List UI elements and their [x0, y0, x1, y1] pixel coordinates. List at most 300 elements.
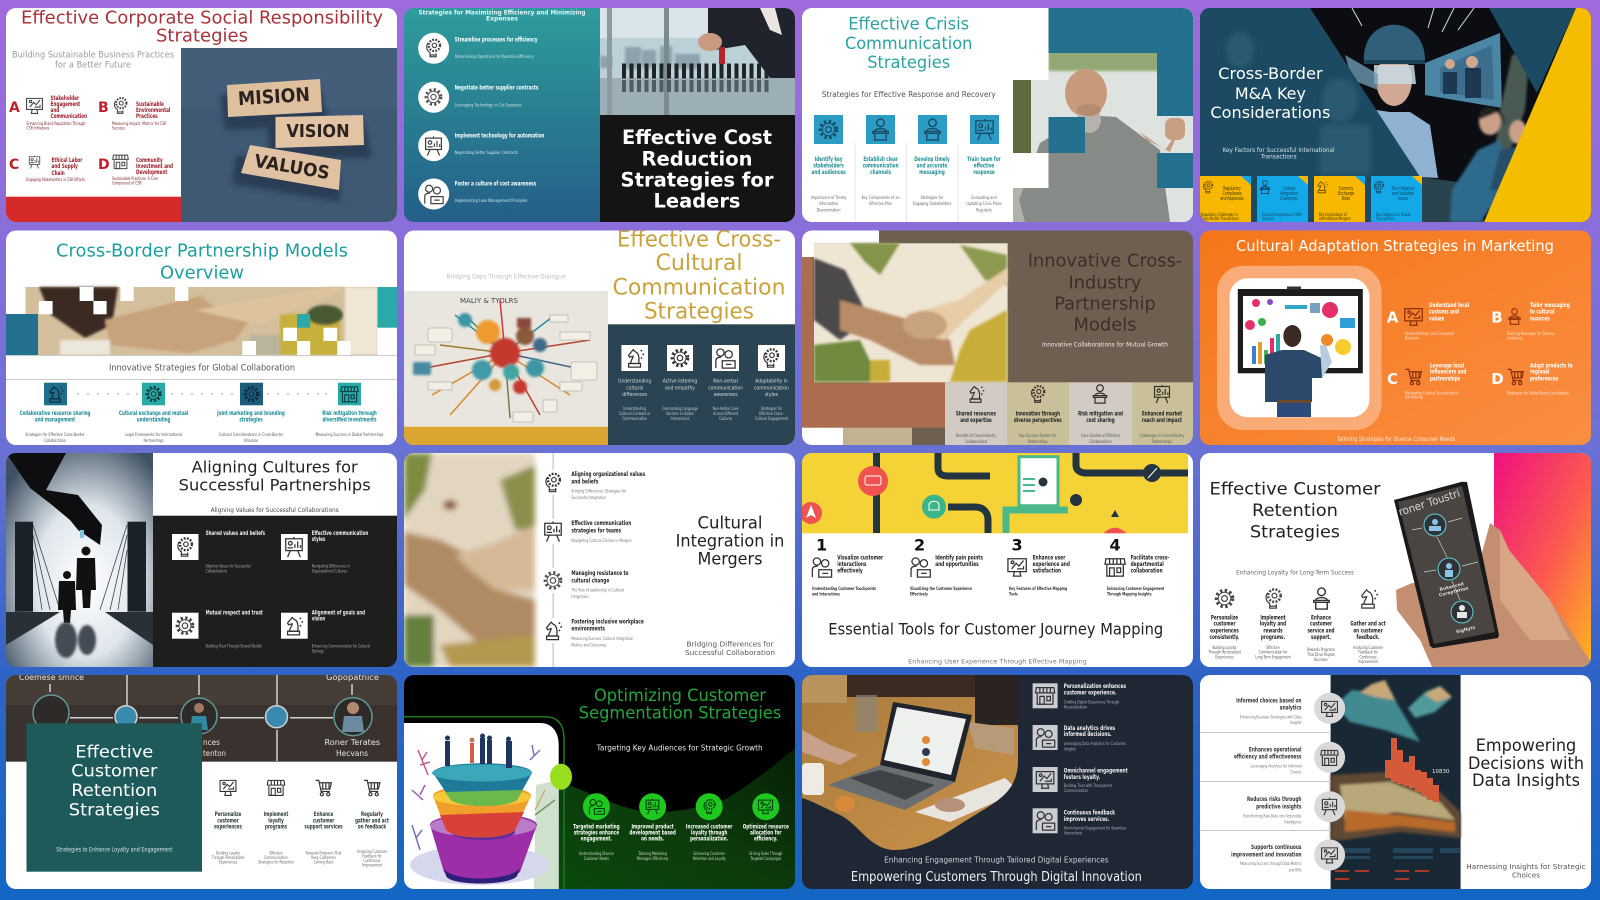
pillar 1: Understanding [618, 378, 651, 385]
step 3: Integration [571, 595, 589, 599]
model 3 [216, 383, 285, 443]
photo: wooden blocks mission vision values: VALUOS [253, 151, 331, 184]
item D community: Investment and [136, 163, 173, 170]
item C ethical labor: Ethical Labor [52, 157, 83, 164]
factor card 4: Due Diligence in Global [1376, 213, 1410, 217]
photo: presenter gesturing [1013, 45, 1193, 222]
tactic 1: experiences [214, 824, 242, 831]
tile 4: Enhanced market [1142, 411, 1182, 418]
tactic 2: loyalty and [1260, 621, 1286, 628]
factor card 3 [1314, 176, 1365, 222]
illustration: yellow journey map [800, 453, 1188, 533]
dark panel [153, 516, 397, 668]
title: Retention [1252, 501, 1338, 521]
pillar 1: Understanding [623, 407, 647, 411]
item D community: Sustainable Practices: A Core [112, 177, 159, 181]
tactic 4: gather and act [355, 818, 389, 825]
tile 3: cost sharing [1086, 417, 1115, 424]
step 2 [541, 519, 632, 544]
step 4: collaboration [1131, 568, 1163, 575]
column 2 [862, 115, 900, 206]
item D community [98, 155, 173, 186]
column 3 [913, 115, 951, 206]
tile 4: Partnerships [1152, 440, 1172, 444]
pillar 2 [662, 345, 698, 421]
segment 2: Messages Effectively [637, 857, 669, 861]
tile 1: Collaborations [965, 440, 987, 444]
light streaks [1352, 8, 1474, 32]
factor card 4: and Valuation [1392, 190, 1414, 196]
column dividers [855, 143, 958, 222]
column 3: and accurate [917, 163, 948, 170]
factor card 2: Challenges [1280, 195, 1298, 201]
photo: 3D terrain with bar data [1331, 675, 1461, 889]
photo: org network diagram: Gopopatnice [326, 673, 379, 682]
tactic 1: Through Personalized [211, 856, 244, 860]
photo: woman in helmet with hologram screens [1345, 25, 1530, 222]
list item 4 [1033, 808, 1126, 835]
title: Partnership [1054, 293, 1156, 314]
slide 2: cost reduction [404, 8, 795, 222]
tactic 3: Enhance [314, 811, 334, 818]
factor card 4 [1371, 176, 1422, 222]
tactic A: customs and [1429, 309, 1459, 316]
model 2 [119, 383, 188, 443]
factor card 1: Compliance [1222, 190, 1242, 196]
tactic 1 [211, 780, 244, 865]
tile 3 [1069, 382, 1132, 445]
item B sustainable: B [98, 100, 109, 116]
slide 16: data insights [1200, 675, 1591, 889]
item D community: Component of CSR [112, 181, 142, 186]
segment 3: personalization. [690, 836, 728, 843]
factor card 3: Currency [1339, 185, 1354, 191]
tile 1 [945, 382, 1007, 445]
insight 3: Intelligence [1284, 820, 1302, 825]
subtitle: Choices [1512, 871, 1540, 879]
tactic 3: Business [1314, 658, 1328, 662]
item D community: Community [136, 157, 163, 164]
white illustration panel with funnel [404, 723, 559, 889]
title [676, 513, 784, 568]
tactic 2 [1255, 589, 1291, 659]
tactic C: partnerships [1430, 376, 1460, 383]
item B sustainable [98, 98, 171, 131]
insight 3 [1242, 791, 1345, 825]
step 4: environments [571, 626, 605, 633]
list item 2 [1033, 725, 1126, 751]
model 3: Cultural Considerations in Cross-Border [219, 433, 283, 437]
segment 4: efficiency. [754, 836, 778, 843]
background teal shards [1200, 8, 1576, 222]
step 1: and Interactions [812, 592, 840, 597]
column 2: Establish clear [863, 156, 898, 163]
tactic 1: Building Loyalty [216, 851, 241, 855]
step 1 [812, 536, 883, 597]
model 2: Cultural exchange and mutual [119, 410, 188, 417]
factor card 3: International Mergers [1319, 217, 1351, 221]
title panel: Leaders [654, 190, 740, 212]
insight 1: analytics [1280, 705, 1302, 712]
tile 1: Benefits of Cross-Industry [956, 434, 997, 438]
model 3: Joint marketing and branding [216, 410, 285, 417]
title panel: Effective Cost [622, 126, 772, 149]
step 3: cultural change [571, 578, 610, 585]
step 2 [910, 536, 983, 597]
title: Effective Cross- [617, 228, 781, 253]
model 2: understanding [137, 417, 171, 424]
yellow wedge [1484, 8, 1591, 222]
list item 2: Insights [1064, 747, 1076, 751]
title [579, 686, 781, 723]
tile 4: reach and impact [1142, 417, 1182, 424]
pillar 2: Overcoming Language [662, 407, 698, 411]
factor card 2 [1257, 176, 1308, 222]
title: Industry [1068, 272, 1142, 293]
title: Successful Partnerships [179, 476, 371, 495]
segment 4: Optimized resource [743, 824, 789, 831]
column 1: and audiences [812, 169, 846, 176]
step 3: Managing resistance to [571, 570, 629, 577]
pillar 3: awareness [714, 392, 738, 398]
pillar 4 [754, 345, 789, 421]
list item 1: Personalization enhances [1064, 683, 1126, 690]
tile 2: diverse perspectives [1014, 417, 1062, 424]
tactic D: D [1491, 370, 1504, 388]
segment 2: Tailoring Marketing [638, 852, 667, 856]
step 3 [1008, 536, 1070, 597]
model 1: Collaboration [44, 439, 66, 443]
model 4: Risk mitigation through [322, 410, 377, 417]
tactic 4 [1350, 590, 1386, 664]
faint crowd in teal panel [1226, 32, 1370, 175]
list item 2 [418, 82, 538, 113]
slide 13: customer retention dark [6, 673, 397, 889]
phone with diagram [1394, 482, 1499, 648]
item C ethical labor: Engaging Stakeholders in CSR Efforts [26, 178, 85, 182]
pillar 4: styles [765, 392, 778, 398]
pillar 1: Cultural Contexts in [619, 412, 651, 416]
model 4 [316, 383, 383, 437]
segment 2: Improved product [631, 824, 674, 831]
subtitle: Transactions [1260, 154, 1297, 161]
tactic D [1491, 363, 1573, 395]
factor card 4: Issues [1398, 195, 1408, 201]
tactic 1 [1207, 590, 1241, 659]
column 4: effective [974, 163, 995, 170]
insight 2 [1234, 742, 1345, 775]
step 2: and opportunities [935, 561, 979, 568]
value 1: Aligning Values for Successful [206, 564, 251, 569]
tactic C: Leverage local [1430, 363, 1464, 370]
title: Cultural Adaptation Strategies in Marketing [1236, 237, 1554, 255]
title: Optimizing Customer [594, 686, 766, 706]
tactic B [1491, 302, 1570, 341]
title [845, 14, 972, 73]
tactic 2: programs. [1261, 634, 1285, 641]
pillar 4: Strategies for [761, 407, 782, 411]
tactic 1: Personalize [1211, 615, 1239, 622]
tile 1: and expertise [960, 417, 992, 424]
column 1 [811, 115, 847, 212]
tactic C: Advertising [1405, 395, 1423, 400]
title [56, 241, 348, 283]
insight 4: improvement and innovation [1231, 852, 1302, 859]
step 1 [541, 470, 645, 500]
column 3: Strategies for [921, 195, 944, 200]
step 3: The Role of Leadership in Cultural [571, 588, 624, 593]
tactic B: Tailoring Messages for Diverse [1506, 332, 1555, 336]
pillar 4: Adaptability in [755, 378, 788, 385]
column 4: Train team for [967, 156, 1001, 163]
step 3: satisfaction [1033, 568, 1061, 575]
value 4: vision [312, 616, 326, 623]
segment 3: Retention and Loyalty [693, 857, 726, 861]
mind map illustration [404, 291, 608, 427]
gold footer strip [404, 427, 608, 446]
slide 6: cross-cultural communication [404, 228, 795, 446]
title: Effective Crisis [848, 14, 969, 34]
item A stakeholder: Stakeholder [50, 95, 79, 102]
subtitle [1466, 863, 1586, 879]
subtitle: Enhancing Engagement Through Tailored Digital Experiences [884, 855, 1109, 864]
column 4: response [973, 169, 995, 176]
pillar 1: Communication [622, 417, 648, 421]
tactic D: regional [1530, 369, 1550, 376]
slide 3: crisis communication [802, 8, 1194, 222]
subtitle: Enhancing User Experience Through Effective Mapping [908, 658, 1087, 666]
title: Aligning Cultures for [192, 458, 358, 477]
insight 2: Leveraging Analytics for Informed [1251, 764, 1302, 769]
title card [26, 723, 202, 872]
subtitle: for a Better Future [55, 60, 131, 70]
value 2: Navigating Differences in [312, 564, 350, 569]
photo: wooden blocks mission vision values: VISION [286, 121, 350, 142]
tactic 3: Coming Back [314, 860, 334, 865]
title: Models [1074, 315, 1136, 336]
segment 1: Customer Needs [584, 857, 609, 861]
title: Effective Corporate Social Responsibility [21, 8, 383, 28]
segment 1 [573, 793, 620, 861]
factor card 1: Regulatory Challenges in [1201, 213, 1238, 217]
segment 1: engagement. [581, 836, 612, 843]
tactic A: Understand local [1429, 302, 1469, 309]
subtitle: Enhancing Loyalty for Long-Term Success [1236, 568, 1355, 576]
list item 2: Negotiate better supplier contracts [455, 85, 538, 92]
pillar 3 [708, 345, 743, 421]
slide 10: cultural integration [404, 453, 795, 667]
list item 3 [418, 130, 545, 161]
factor card 1: Cross-Border Transactions [1201, 217, 1239, 221]
insight 4: and KPIs [1289, 868, 1302, 873]
tactic 2: Communication [264, 856, 288, 860]
model 1: and management [35, 417, 76, 424]
column 3: Develop timely [914, 156, 950, 163]
step 4: Facilitate cross- [1131, 555, 1169, 562]
column 1: Dissemination [817, 207, 841, 212]
tactic 1: customer [1213, 621, 1236, 628]
tile 3: Collaborations [1089, 440, 1112, 444]
column 3: Engaging Stakeholders [913, 201, 951, 206]
red footer band [6, 197, 181, 223]
column 4 [966, 115, 1002, 212]
tactic B: Tailor messaging [1530, 302, 1570, 309]
factor card 4: Due Diligence [1392, 185, 1415, 191]
item A stakeholder: and [50, 107, 60, 114]
title: Empowering [1476, 736, 1576, 755]
subtitle: Key Factors for Successful International [1223, 147, 1335, 154]
title: M&A Key [1235, 84, 1306, 103]
item A stakeholder: A [9, 100, 20, 116]
title: Mergers [698, 549, 762, 568]
pillar 3: Non-verbal [713, 378, 738, 385]
segment 3: loyalty through [691, 830, 728, 837]
tactic 3: customer [313, 818, 335, 825]
pillar 2: Barriers in Global [666, 412, 694, 416]
title panel [600, 115, 795, 222]
value 4 [281, 610, 370, 653]
tile 3: Case Studies of Effective [1081, 434, 1121, 438]
step 1: Visualize customer [837, 555, 883, 562]
segment 3: Enhancing Customer [694, 852, 725, 856]
green outline [404, 717, 564, 889]
title: Empowering Customers Through Digital Innovation [851, 870, 1142, 885]
title: Strategies [156, 26, 248, 46]
column 3: messaging [919, 169, 945, 176]
slide 8: cultural adaptation marketing [1200, 230, 1591, 446]
column 4: Evaluating and [971, 195, 997, 200]
model 1: Strategies for Effective Cross-Border [25, 433, 85, 437]
list item 2: Leveraging Technology to Cut Expenses [455, 102, 521, 108]
tactic 1: Personalize [215, 811, 242, 818]
title: Cultural [698, 513, 762, 532]
tile 2: Key Success Factors for [1019, 434, 1057, 438]
title panel: Strategies for [620, 169, 774, 192]
step 2: 2 [914, 536, 925, 555]
hand holding phone [1396, 523, 1591, 667]
insight 3: Reduces risks through [1247, 796, 1302, 803]
item C ethical labor [9, 156, 85, 182]
tactic A [1387, 302, 1469, 341]
phone with diagram: SigNyts [1456, 625, 1476, 635]
factor card 2: Integration [1280, 190, 1298, 196]
segment 1: Understanding Diverse [579, 852, 614, 856]
segment 1: Targeted marketing [573, 824, 620, 831]
insight 1: Enhancing Business Strategies with Data [1240, 715, 1302, 719]
value 4: Enhancing Communication for Cultural [312, 644, 370, 648]
photo: blurred handshake [404, 453, 535, 667]
photo: org network diagram: Coemese smnce [19, 673, 84, 682]
subtitle: Innovative Collaborations for Mutual Growth [1042, 341, 1168, 349]
tactic A: values [1429, 316, 1444, 323]
tile 2: Partnerships [1028, 440, 1048, 444]
tactic 1: consistently. [1210, 634, 1239, 641]
segment 4 [743, 793, 789, 861]
tactic 3: support services [304, 824, 343, 831]
tactic 3 [1307, 588, 1335, 662]
tactic 4: Analyzing Customer [1353, 646, 1384, 650]
tactic 3: Rewards Programs That [306, 851, 342, 855]
list item 4: Implementing Lean Management Principles [455, 198, 527, 203]
tactic A: A [1387, 309, 1399, 327]
step 2: Visualizing the Customer Experience [910, 587, 973, 591]
value 3: Mutual respect and trust [206, 610, 263, 617]
factor card 1 [1200, 176, 1251, 222]
segment 3 [686, 793, 733, 861]
title card: Strategies to Enhance Loyalty and Engagement [56, 847, 173, 854]
title: Innovative Cross- [1028, 251, 1182, 272]
pillar 3: Cultures [719, 417, 732, 421]
tactic 1: Experiences [1215, 655, 1234, 659]
value 3 [172, 610, 263, 648]
subtitle: Bridging Differences for [686, 641, 774, 649]
factor card 2: Cultural Integration in M&A [1262, 213, 1302, 217]
tactic 4: Analyzing Customer [357, 850, 388, 854]
list item 1: Crafting Digital Experience Through [1064, 700, 1120, 704]
title: Cross-Border Partnership Models [56, 241, 348, 262]
item A stakeholder: CSR Initiatives [26, 126, 49, 131]
phone with diagram: roner Toustri [1397, 487, 1462, 519]
tactic 4: Regularly [361, 811, 383, 818]
step 2: Identify pain points [935, 555, 983, 562]
step 3: 3 [1012, 536, 1023, 555]
step 1: and beliefs [571, 479, 598, 486]
subtitle [12, 50, 174, 68]
list item 3: Omnichannel engagement [1064, 768, 1128, 775]
model 2: Legal Frameworks for International [125, 433, 182, 437]
list item 2: Data analytics drives [1064, 725, 1115, 732]
item B sustainable: Success [112, 126, 125, 131]
tactic 4: Continuous [1360, 655, 1377, 659]
slide heading: Expenses [486, 16, 518, 22]
item A stakeholder [9, 95, 87, 131]
pillar 1: differences [622, 392, 648, 398]
step 4: departmental [1131, 561, 1164, 568]
slide 12: customer retention with phone [1200, 453, 1591, 667]
insight 4 [1231, 840, 1345, 873]
tile 3: Risk mitigation and [1078, 411, 1123, 418]
row dividers [1200, 732, 1331, 831]
item A stakeholder: Engagement [50, 101, 81, 108]
pillar 2: Interactions [671, 417, 689, 421]
mosaic tiles [6, 287, 398, 356]
title [612, 228, 786, 324]
list item 3: Negotiating Better Supplier Contracts [455, 150, 518, 155]
title: Integration in [676, 532, 784, 551]
item C ethical labor: and Supply [52, 163, 78, 170]
tactic 2: loyalty [268, 818, 284, 825]
slide 4: cross-border M&A [1200, 8, 1591, 222]
step 2: Navigating Cultural Clashes in Mergers [571, 539, 632, 543]
tactic C: C [1387, 370, 1398, 388]
factor card 4: Transactions [1375, 217, 1394, 221]
title: Considerations [1210, 103, 1330, 122]
title: Data Insights [1472, 771, 1580, 790]
pillar 1: cultural [626, 385, 643, 391]
phone with diagram: Bukanced [1439, 581, 1465, 593]
tactic B: B [1491, 309, 1503, 327]
insight 1: Insights [1290, 721, 1302, 725]
tactic 2: Effective [269, 851, 283, 855]
title [1211, 67, 1330, 118]
value 3: Building Trust Through Shared Beliefs [206, 644, 262, 648]
item A stakeholder: Enhancing Brand Reputation Through [26, 122, 86, 126]
segment 2: on needs. [641, 836, 664, 843]
tile 2 [1007, 382, 1069, 445]
slide 11: customer journey mapping [800, 453, 1193, 667]
list item 4: Interactions [1064, 831, 1082, 835]
tactic 4: Feedback for [1358, 650, 1378, 655]
